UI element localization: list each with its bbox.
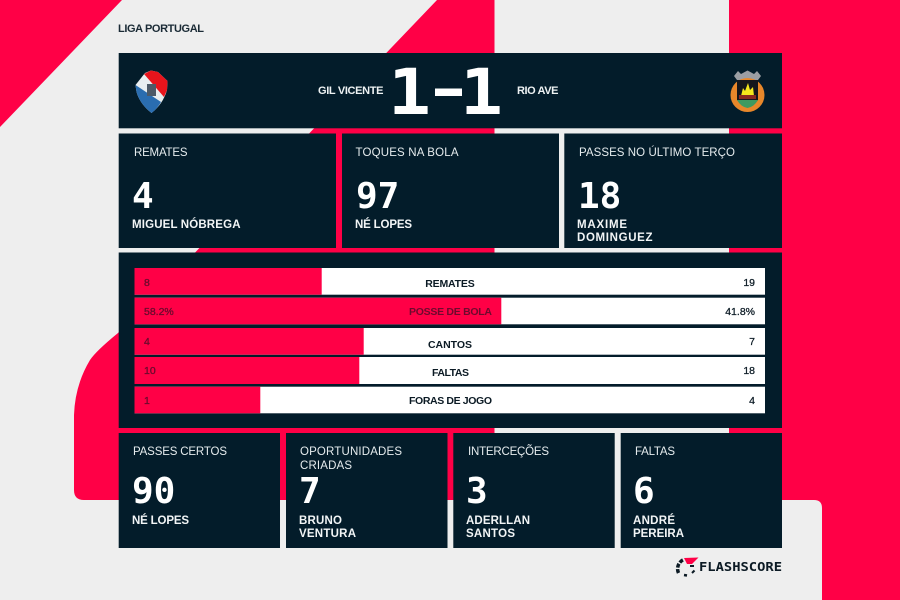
panel: oportunidades criadas: CRIADAS [300, 460, 352, 472]
bar: faltas [134, 357, 765, 384]
value: 3 [466, 471, 488, 512]
league label: LIGA PORTUGAL [118, 23, 204, 35]
icon: flashscore mark [678, 558, 698, 576]
panel: oportunidades criadas [286, 433, 448, 548]
heading: PASSES CERTOS [133, 446, 227, 458]
player: BRUNO [299, 515, 342, 527]
red right shape [729, 0, 900, 600]
bar: posse de bola [134, 298, 765, 324]
bar: faltas: FALTAS [432, 367, 469, 379]
logo: Flashscore [678, 558, 782, 576]
value: 4 [132, 176, 154, 217]
bar: faltas: 18 [743, 365, 755, 377]
bar: cantos: 4 [144, 336, 150, 348]
panel: match header [119, 53, 782, 129]
panel: faltas: PEREIRA [633, 528, 684, 540]
score: 1 [460, 56, 503, 129]
bar: cantos: CANTOS [428, 339, 472, 351]
bar: remates [134, 268, 765, 295]
bar: remates: REMATES [425, 278, 475, 290]
bar: faltas: 10 [144, 365, 156, 377]
bar: posse de bola: 58.2% [144, 306, 174, 318]
player: ANDRÉ [633, 514, 675, 527]
red triangle top left [0, 0, 122, 127]
panel: toques na bola [342, 134, 559, 248]
bar: posse de bola: POSSE DE BOLA [409, 306, 492, 318]
team name: Rio Ave: RIO AVE [517, 85, 558, 97]
bar: cantos: 7 [749, 336, 755, 348]
player: NÉ LOPES [355, 218, 412, 231]
bar: foras de jogo: FORAS DE JOGO [409, 395, 492, 407]
panel: oportunidades criadas: VENTURA [299, 528, 356, 540]
player: ADERLLAN [466, 515, 530, 527]
panel: passes no ultimo terco: DOMINGUEZ [577, 232, 652, 244]
red central shape [74, 0, 494, 500]
heading: REMATES [134, 147, 188, 159]
bar: foras de jogo [134, 387, 765, 413]
bar: remates: 8 [144, 277, 150, 289]
panel: faltas [621, 433, 782, 548]
value: 97 [356, 176, 399, 217]
bar: cantos [134, 328, 765, 355]
heading: FALTAS [635, 446, 675, 458]
score: 1 [388, 56, 431, 129]
wordmark: FLASHSCORE [699, 559, 782, 574]
bar: foras de jogo: 4 [749, 395, 755, 407]
player: MIGUEL NÓBREGA [132, 218, 240, 231]
score [388, 56, 503, 129]
panel: passes no ultimo terco [564, 134, 782, 248]
heading: TOQUES NA BOLA [356, 147, 459, 159]
bar: foras de jogo: 1 [144, 395, 150, 407]
panel: intercecoes [453, 433, 615, 548]
panel: intercecoes: SANTOS [466, 528, 515, 540]
icon: Gil Vicente crest [136, 70, 168, 113]
player: MAXIME [577, 219, 627, 231]
value: 18 [578, 176, 621, 217]
heading: OPORTUNIDADES [300, 446, 402, 458]
panel: passes certos [119, 433, 280, 548]
value: 6 [633, 471, 655, 512]
panel: remates [119, 134, 336, 248]
bar: remates: 19 [743, 277, 755, 289]
player: NÉ LOPES [132, 514, 189, 527]
panel: team stats comparison [119, 252, 782, 428]
icon: Rio Ave crest [730, 70, 764, 112]
heading: PASSES NO ÚLTIMO TERÇO [579, 146, 735, 159]
team name: Gil Vicente: GIL VICENTE [318, 85, 384, 97]
value: 90 [132, 471, 175, 512]
value: 7 [299, 471, 321, 512]
bar: posse de bola: 41.8% [725, 306, 755, 318]
heading: INTERCEÇÕES [468, 445, 549, 458]
